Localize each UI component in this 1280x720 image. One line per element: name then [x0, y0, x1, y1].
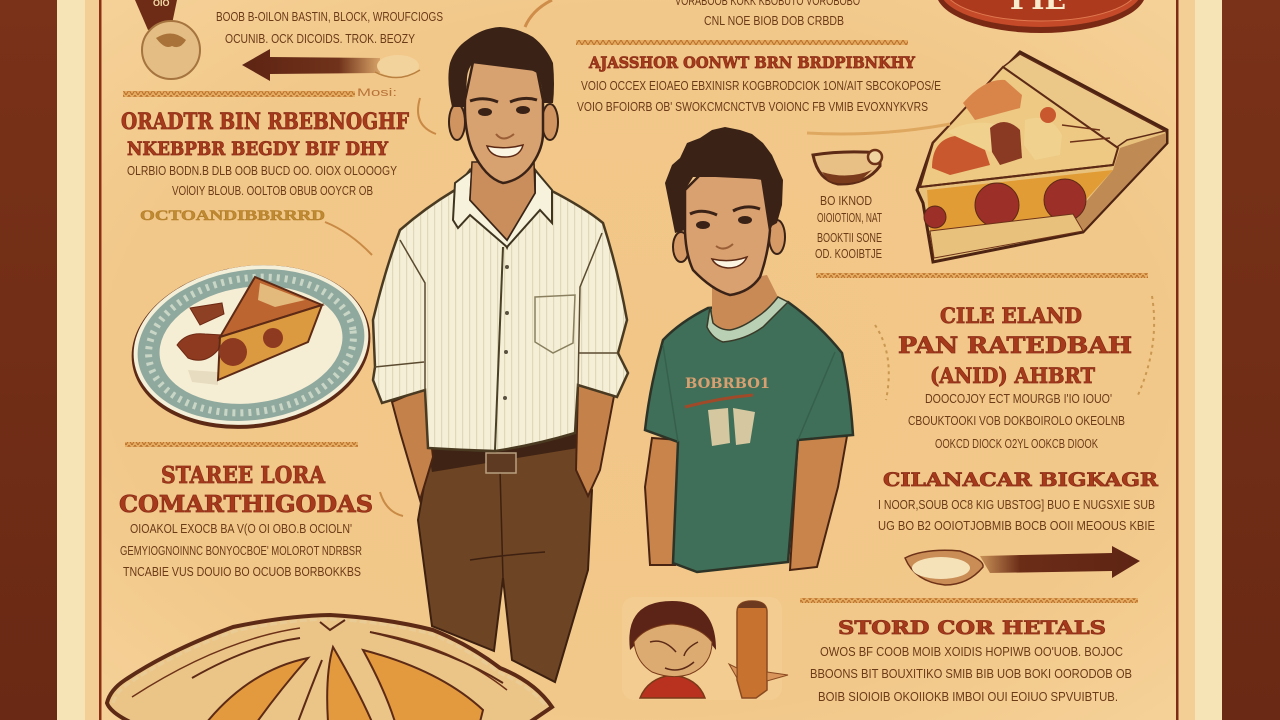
panel: lower left section: STAREE LORA	[161, 462, 326, 489]
panel: lower left section: COMARTHIGODAS	[119, 491, 373, 518]
text block: top center: CNL NOE BIOB DOB CRBDB	[704, 14, 844, 28]
panel: upper left section: ORADTR BIN RBEBNOGHF	[121, 109, 409, 135]
panel: top center section: VOIO BFOIORB OB' SWOKCMCNCTVB VOIONC FB VMIB EVOXNYKVRS	[577, 100, 928, 114]
panel: character section	[878, 469, 1158, 533]
icon: child and post	[622, 597, 788, 700]
subheading: gold	[140, 208, 372, 255]
icon: spoon top left	[135, 0, 200, 79]
panel: upper left section: OLRBIO BODN.B DLB OOB BUCD OO. OIOX OLOOOGY	[127, 164, 398, 178]
illustration: whole pie	[107, 615, 552, 720]
boy neck	[712, 275, 778, 330]
panel: character section: CILANACAR BIGKAGR	[883, 469, 1158, 491]
arrow: spoon pointing right	[905, 546, 1140, 585]
man placket	[495, 247, 503, 450]
man belt	[428, 432, 578, 472]
man face	[465, 62, 543, 183]
text block: under bowl: BOOKTII SONE	[817, 231, 882, 245]
flourish: top center swoosh	[525, 0, 552, 27]
man ears	[449, 104, 465, 140]
panel: top center section: VOIO OCCEX EIOAEO EBXINISR KOGBRODCIOK 1ON/AIT SBCOKOPOS/E	[581, 79, 941, 93]
panel: lower left section: OIOAKOL EXOCB BA V(O OI OBO.B OCIOLN'	[130, 522, 352, 536]
panel: bottom right section	[810, 617, 1132, 704]
flourish: lower left curve	[380, 492, 403, 516]
panel: right middle section: (ANID) AHBRT	[930, 363, 1095, 388]
boy features	[690, 207, 760, 215]
panel: lower left section: GEMYIOGNOINNC BONYOCBOE' MOLOROT NDRBSR	[120, 544, 362, 558]
badge: red oval title	[936, 0, 1146, 33]
panel: top center section: AJASSHOR OONWT BRN BRDPIBNKHY	[588, 53, 916, 72]
text block: top left: OCUNIB. OCK DICOIDS. TROK. BEOZY	[225, 32, 416, 46]
divider: upper left: Mosi:	[357, 87, 397, 99]
man trousers	[418, 432, 592, 682]
divider: top center	[576, 40, 908, 45]
panel: lower left section: TNCABIE VUS DOUIO BO OCUOB BORBOKKBS	[123, 565, 361, 579]
panel: bottom right section: BOIB SIOIOIB OKOIIOKB IMBOI OUI EOIUO SPVUIBTUB.	[818, 690, 1118, 704]
panel: character section: UG BO B2 OOIOTJOBMIB BOCB OOII MEOOUS KBIE	[878, 519, 1155, 533]
boy face	[685, 175, 770, 295]
flourishes: dotted curves	[875, 296, 1154, 400]
divider: upper left	[123, 87, 397, 99]
panel: bottom right section: STORD COR HETALS	[838, 617, 1106, 639]
text block: under bowl: BO IKNOD	[820, 194, 872, 208]
panel: right middle section: DOOCOJOY ECT MOURGB I'IO IOUO'	[925, 392, 1112, 406]
panel: bottom right section: BBOONS BIT BOUXITIKO SMIB BIB UOB BOKI OORODOB OB	[810, 667, 1132, 681]
panel: character section: I NOOR,SOUB OC8 KIG UBSTOG] BUO E NUGSXIE SUB	[878, 498, 1155, 512]
man neck	[470, 162, 535, 240]
flourish: curve near heading	[418, 98, 436, 134]
text block: under bowl: OIOIOTION, NAT	[817, 211, 882, 225]
man forearms	[392, 388, 433, 500]
man features	[470, 98, 537, 102]
divider: right lower	[800, 598, 1138, 603]
boy ears	[673, 232, 689, 262]
panel: right middle section: OOKCD DIOCK O2YL OOKCB DIOOK	[935, 437, 1098, 451]
panel: right middle section: CBOUKTOOKI VOB DOKBOIROLO OKEOLNB	[908, 414, 1125, 428]
divider: lower left	[125, 442, 358, 447]
boy collar	[707, 297, 788, 342]
panel: lower left section	[119, 462, 373, 579]
slice crust	[1003, 54, 1165, 147]
slice filling	[920, 67, 1118, 187]
man pocket	[535, 295, 575, 353]
man shirt	[373, 170, 628, 451]
boy t-shirt	[645, 302, 853, 572]
panel: upper left section	[121, 109, 409, 198]
divider: above bowl	[807, 124, 950, 134]
arrow: pointing left	[242, 49, 420, 81]
subheading: gold: OCTOANDIBBRRRD	[140, 208, 325, 224]
man hair	[448, 27, 554, 107]
illustration: pie slice	[917, 52, 1167, 262]
boy hair	[665, 127, 783, 233]
illustration: pie on plate	[121, 250, 381, 444]
text block: top left: BOOB B-OILON BASTIN, BLOCK, WROUFCIOGS	[216, 10, 443, 24]
illustration: man	[373, 27, 628, 682]
icon: bowl	[813, 150, 882, 184]
text block: under bowl	[815, 194, 882, 261]
text block: top center	[675, 0, 860, 28]
boy arms	[645, 438, 680, 565]
panel: top center section	[577, 53, 941, 114]
panel: right middle section: PAN RATEDBAH	[898, 333, 1132, 359]
panel: right middle section: CILE ELAND	[940, 303, 1082, 328]
boy shirt print: BOBRBO1	[685, 376, 770, 392]
panel: upper left section: VOlOIY BLOUB. OOLTOB OBUB OOYCR OB	[172, 184, 373, 198]
text block: top left	[216, 10, 443, 46]
slice side	[1073, 133, 1166, 231]
slice cheese layer	[927, 170, 1113, 231]
text block: under bowl: OD. KOOIBTJE	[815, 247, 882, 261]
panel: right middle section	[898, 303, 1132, 451]
divider: right upper	[816, 273, 1148, 278]
man collar	[453, 170, 552, 247]
illustration: boy	[645, 127, 853, 572]
panel: upper left section: NKEBPBR BEGDY BIF DHY	[127, 138, 388, 160]
panel: bottom right section: OWOS BF COOB MOIB XOIDIS HOPIWB OO'UOB. BOJOC	[820, 645, 1123, 659]
